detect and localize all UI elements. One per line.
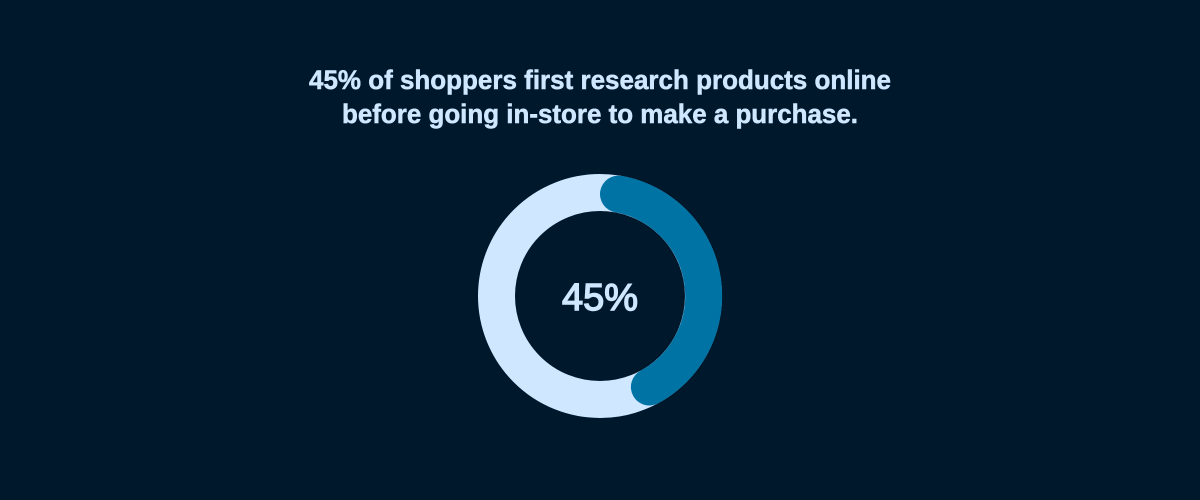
center value: 45% <box>562 277 638 319</box>
donut track: remaining share <box>496 192 704 400</box>
title <box>309 65 891 129</box>
donut chart <box>496 192 704 400</box>
donut arc: 45% share <box>618 194 704 387</box>
title: before going in-store to make a purchase. <box>342 99 858 129</box>
title: 45% of shoppers first research products online <box>309 65 891 95</box>
